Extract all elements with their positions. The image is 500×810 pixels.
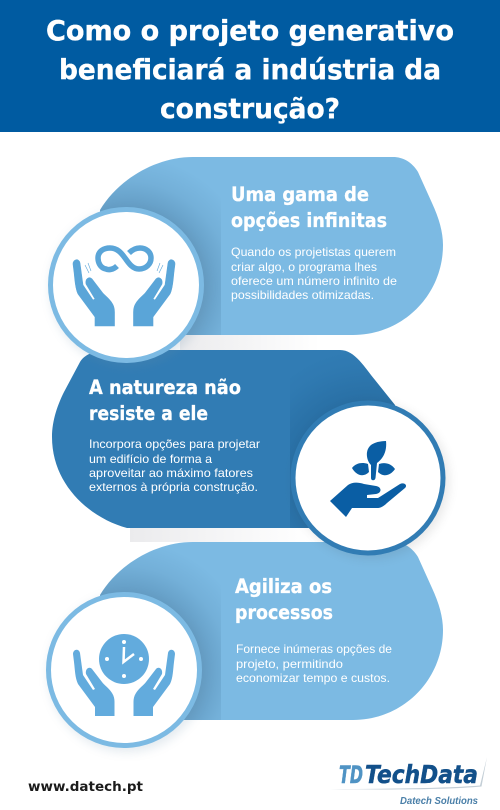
icon: left hand [73, 650, 114, 716]
header band [0, 0, 500, 132]
title line 3: construção? [160, 93, 340, 125]
body text: economizar tempo e custos. [236, 672, 390, 685]
logo wordmark: TechData [365, 760, 478, 789]
body text: aproveitar ao máximo fatores [89, 467, 253, 480]
heading: Uma gama de [231, 183, 369, 206]
heading line 2: resiste a ele [89, 402, 208, 425]
body text: Fornece inúmeras opções de [236, 643, 392, 656]
body text: projeto, permitindo [236, 658, 343, 671]
panel: agiliza [100, 542, 443, 720]
panel: natureza [52, 350, 395, 528]
logo: Tech Data [330, 757, 487, 807]
body text [89, 438, 260, 494]
icon: right hand [134, 260, 175, 326]
body text: um edifício de forma a [89, 453, 213, 466]
body text: oferece um número infinito de [231, 275, 397, 288]
logo mark: TD [339, 761, 363, 789]
body text: externos à própria construção. [89, 481, 258, 494]
heading: Agiliza os [235, 575, 332, 598]
panel: opções infinitas [100, 157, 443, 335]
icon: right hand [134, 650, 175, 716]
body text: Quando os projetistas querem [231, 246, 396, 259]
icon circle: infinity in hands [50, 209, 208, 367]
body text [231, 246, 397, 302]
heading: A natureza não [89, 376, 241, 399]
title line 2: beneficiará a indústria da [59, 54, 441, 86]
logo subtitle: Datech Solutions [400, 795, 478, 807]
icon: left hand [73, 260, 114, 326]
title: Como o projeto generativo [46, 15, 454, 47]
icon: hand [330, 483, 406, 517]
body text [236, 643, 392, 685]
icon: sprout [352, 441, 395, 480]
icon: clock [99, 634, 149, 684]
website url: www.datech.pt [28, 779, 144, 795]
body text: Incorpora opções para projetar [89, 438, 260, 451]
body text: criar algo, o programa lhes [231, 261, 377, 274]
heading line 2: processos [235, 601, 333, 624]
icon circle: clock in hands [48, 594, 206, 752]
icon: infinity [98, 248, 151, 270]
body text: possibilidades otimizadas. [231, 289, 374, 302]
heading line 2: opções infinitas [231, 209, 387, 232]
icon circle: plant in hand [293, 403, 449, 559]
